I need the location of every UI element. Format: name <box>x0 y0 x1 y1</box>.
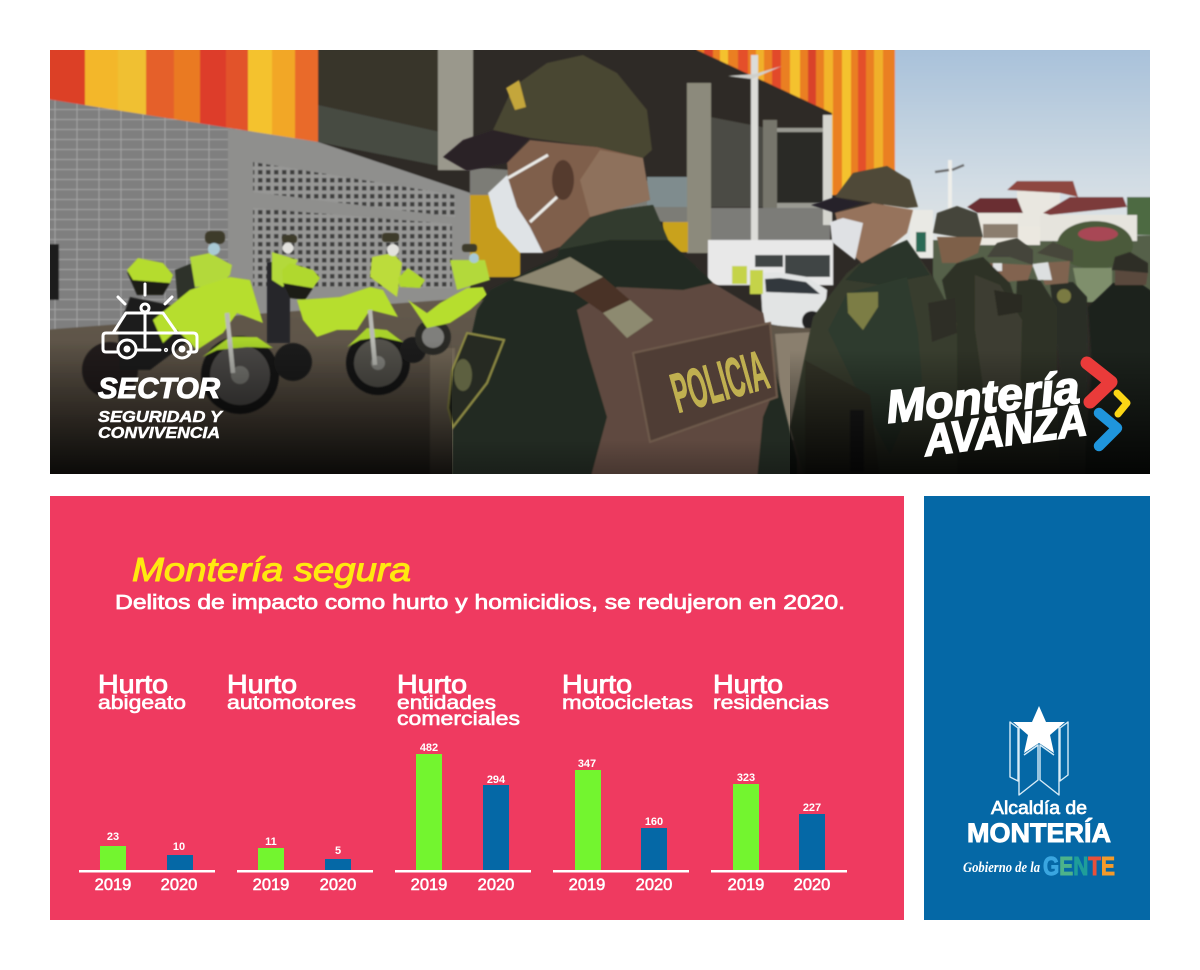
icon: star emblem <box>1010 706 1068 795</box>
logo: Montería Avanza <box>884 361 1127 466</box>
subtitle: Delitos de impacto como hurto y homicidios, se redujeron en 2020. <box>115 592 845 614</box>
wheels <box>82 319 451 414</box>
lamp post <box>751 55 758 275</box>
chart: hurto entidades comerciales: 2020 <box>478 876 514 894</box>
right orange facade <box>696 50 896 196</box>
chart: hurto motocicletas: 2019 <box>569 876 605 894</box>
photo: main police officer <box>443 55 797 480</box>
chart: hurto abigeato: 10 <box>173 841 185 853</box>
photo: stadium background <box>40 40 1160 480</box>
chart: hurto entidades comerciales <box>395 669 531 894</box>
photo: officers on the right <box>790 165 1150 452</box>
lattice <box>253 162 455 217</box>
chart: hurto abigeato <box>79 669 215 894</box>
icon: police car <box>103 284 197 358</box>
panel: pink statistics panel <box>50 496 904 920</box>
chart: hurto abigeato: 2019 <box>95 876 131 894</box>
panel: blue logo panel <box>924 496 1150 920</box>
logo text: Alcaldía de Montería <box>967 798 1111 848</box>
shoulder badge <box>448 333 504 427</box>
chart: hurto entidades comerciales: 482 <box>420 742 438 754</box>
logo text: Gobierno de la Gente: Gobierno de la <box>963 860 1040 876</box>
van and patrol car <box>708 240 833 285</box>
heading: sector: CONVIVENCIA <box>98 425 220 442</box>
ground <box>50 299 812 456</box>
chart: hurto entidades comerciales: comerciales <box>397 709 520 730</box>
chart: hurto motocicletas: 160 <box>645 816 663 828</box>
vest <box>577 283 777 480</box>
chart: hurto motocicletas: 347 <box>578 758 596 770</box>
cap <box>493 55 652 158</box>
chart: hurto entidades comerciales: Hurto <box>397 669 467 699</box>
logo: Montería Avanza: AVANZA <box>920 396 1090 466</box>
logo: Montería Avanza: Montería <box>884 361 1082 433</box>
chart: hurto entidades comerciales: 2019 <box>411 876 447 894</box>
chart: hurto residencias <box>711 669 847 894</box>
chart: hurto automotores: 11 <box>265 836 277 848</box>
logo text: Gobierno de la Gente: GENTE <box>1043 851 1115 881</box>
photo: main police officer: POLICIA <box>664 338 775 425</box>
chart: hurto entidades comerciales: entidades <box>397 693 496 714</box>
head <box>507 140 650 253</box>
chart: hurto abigeato: Hurto <box>98 669 168 699</box>
photo darkening left and right <box>50 340 1150 474</box>
logo text: Gobierno de la Gente <box>963 851 1115 881</box>
chart: hurto abigeato: 23 <box>107 831 119 843</box>
photo: motorcycles and officers <box>82 231 490 414</box>
chart: hurto abigeato: abigeato <box>98 693 186 714</box>
chart: hurto automotores: Hurto <box>227 669 297 699</box>
lime bodies <box>118 258 487 373</box>
chart: hurto abigeato: 2020 <box>161 876 197 894</box>
orange facade left <box>50 50 320 143</box>
officer five <box>1032 241 1088 304</box>
officer two <box>790 166 957 480</box>
chart: hurto automotores: 5 <box>335 845 341 857</box>
brick wall <box>50 98 304 330</box>
officer six <box>1088 252 1150 430</box>
chart: hurto motocicletas: Hurto <box>562 669 632 699</box>
chart: hurto motocicletas <box>553 669 693 894</box>
title: Montería segura <box>132 551 411 588</box>
chart: hurto automotores: automotores <box>227 693 356 714</box>
chart: hurto automotores: 2019 <box>253 876 289 894</box>
chart: hurto residencias: 323 <box>737 772 755 784</box>
dark stairs <box>318 50 438 132</box>
chart: hurto residencias: 227 <box>803 802 821 814</box>
chart: hurto motocicletas: 2020 <box>636 876 672 894</box>
heading: sector <box>98 377 224 438</box>
logo text: Alcaldía de Montería: Alcaldía de <box>991 798 1087 818</box>
logo text: Alcaldía de Montería: MONTERÍA <box>967 817 1111 848</box>
officers by the bikes <box>175 231 490 343</box>
officer four <box>988 237 1056 375</box>
house and street <box>948 160 952 210</box>
panel: hero photo <box>40 40 1160 480</box>
chart: hurto motocicletas: motocicletas <box>562 693 693 714</box>
officer three <box>932 205 1022 400</box>
concrete stand <box>438 40 473 170</box>
chart: hurto automotores <box>227 669 373 894</box>
mask <box>488 175 543 253</box>
heading: sector: SECTOR <box>98 373 220 405</box>
heading: sector: SEGURIDAD Y <box>98 409 223 426</box>
chart: hurto residencias: 2019 <box>728 876 764 894</box>
chart: hurto entidades comerciales: 294 <box>487 774 506 786</box>
uniform <box>452 238 796 474</box>
chart: hurto residencias: Hurto <box>713 669 783 699</box>
yellow doors <box>468 195 520 277</box>
chart: hurto residencias: residencias <box>713 693 829 714</box>
chart: hurto residencias: 2020 <box>794 876 830 894</box>
chart: hurto automotores: 2020 <box>320 876 356 894</box>
